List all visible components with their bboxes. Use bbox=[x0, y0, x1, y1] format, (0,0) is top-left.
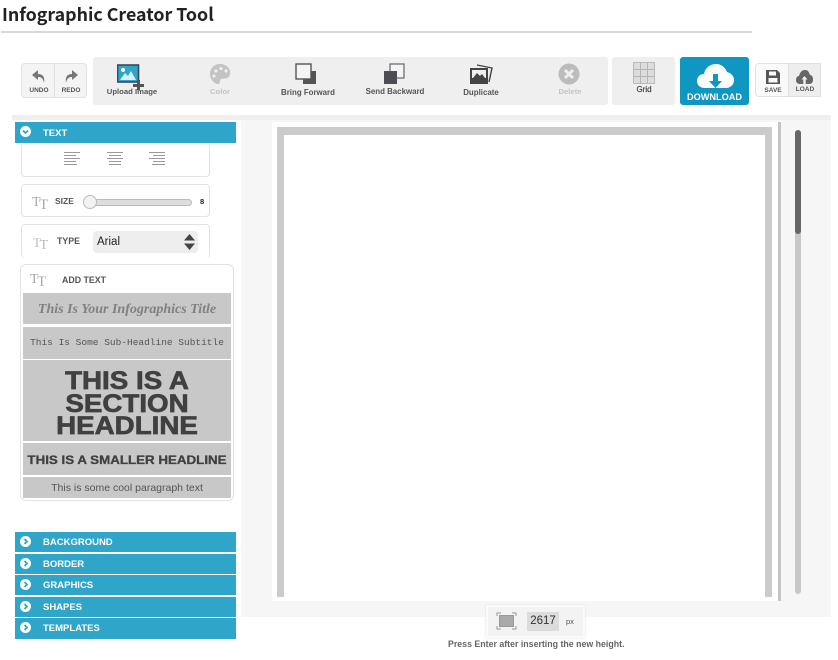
alignment controls bbox=[21, 143, 210, 177]
icon: load bbox=[796, 70, 813, 84]
icon: align right bbox=[149, 152, 165, 165]
sample: section headline: THIS IS A bbox=[65, 367, 189, 395]
sample: paragraph bbox=[23, 477, 231, 498]
icon: duplicate bbox=[470, 64, 493, 84]
download button bbox=[680, 57, 749, 105]
font select: Arial bbox=[97, 236, 120, 248]
icon: text size: TT bbox=[32, 195, 47, 213]
scrollbar thumb bbox=[795, 130, 801, 234]
scrollbar bbox=[795, 130, 801, 594]
label: download: DOWNLOAD bbox=[687, 92, 742, 102]
page sheet bbox=[272, 122, 781, 601]
slider bbox=[84, 199, 192, 206]
toolbar panel bbox=[93, 57, 608, 105]
canvas frame bbox=[277, 127, 772, 597]
shapes section: SHAPES bbox=[43, 602, 82, 613]
panel: canvas workspace bbox=[241, 120, 831, 617]
shapes section bbox=[15, 597, 236, 617]
title: Infographic Creator Tool bbox=[2, 1, 214, 27]
sample: title bbox=[23, 293, 231, 324]
graphics section: GRAPHICS bbox=[43, 580, 93, 591]
sample: subtitle: This Is Some Sub-Headline Subtitle bbox=[30, 337, 224, 348]
text section header: TEXT bbox=[43, 128, 67, 139]
icon: align left bbox=[64, 152, 80, 165]
label: redo: REDO bbox=[62, 87, 80, 94]
background section: BACKGROUND bbox=[43, 537, 113, 548]
label: load: LOAD bbox=[796, 86, 814, 93]
background section bbox=[15, 532, 236, 552]
value: 8 bbox=[200, 197, 204, 206]
templates section bbox=[15, 618, 236, 639]
height hint: Press Enter after inserting the new height. bbox=[448, 639, 624, 649]
sample: smaller headline: THIS IS A SMALLER HEADLINE bbox=[27, 453, 227, 467]
sample: smaller headline bbox=[23, 443, 231, 475]
label: delete: Delete bbox=[558, 87, 582, 96]
font select bbox=[93, 231, 198, 253]
icon: resize bbox=[496, 612, 516, 630]
icon: align center bbox=[107, 152, 123, 165]
sample: section headline bbox=[23, 360, 231, 441]
label: add text: ADD TEXT bbox=[62, 275, 106, 285]
panel: text tools bbox=[15, 122, 236, 501]
border section bbox=[15, 554, 236, 574]
sample: section headline: SECTION bbox=[65, 390, 189, 418]
label: upload image: Upload Image bbox=[107, 87, 157, 96]
icon: cloud download bbox=[697, 64, 734, 88]
graphics section bbox=[15, 575, 236, 595]
icon: undo bbox=[32, 70, 44, 83]
icon: color palette bbox=[210, 64, 230, 84]
height control bbox=[486, 605, 585, 638]
height value: 2617 bbox=[530, 615, 556, 627]
border section: BORDER bbox=[43, 559, 84, 570]
type control bbox=[21, 224, 210, 258]
icon: upload image bbox=[117, 64, 144, 90]
label: undo: UNDO bbox=[29, 87, 49, 94]
label: bring forward: Bring Forward bbox=[281, 88, 335, 97]
label: save: SAVE bbox=[764, 87, 782, 94]
label: size: SIZE bbox=[55, 196, 74, 206]
icon: bring forward bbox=[295, 63, 316, 84]
label: grid: Grid bbox=[636, 85, 652, 94]
icon: delete bbox=[558, 64, 580, 84]
sample: subtitle bbox=[23, 327, 231, 359]
icon: text type: TT bbox=[33, 235, 47, 253]
label: duplicate: Duplicate bbox=[463, 88, 499, 97]
grid button bbox=[612, 57, 675, 105]
icon: add text: TT bbox=[30, 272, 45, 290]
sample: section headline: HEADLINE bbox=[56, 412, 198, 440]
size control bbox=[21, 184, 210, 217]
text section header bbox=[15, 122, 236, 143]
icon: send backward bbox=[384, 63, 405, 84]
sample: paragraph: This is some cool paragraph text bbox=[51, 482, 203, 494]
panel: collapsed sections bbox=[15, 532, 236, 639]
add text panel bbox=[20, 264, 234, 501]
undo redo buttons bbox=[21, 63, 87, 98]
label: type: TYPE bbox=[57, 236, 80, 246]
icon: grid bbox=[633, 62, 655, 84]
templates section: TEMPLATES bbox=[43, 623, 100, 634]
icon: redo bbox=[66, 70, 78, 83]
sample: title: This Is Your Infographics Title bbox=[38, 302, 216, 317]
label: send backward: Send Backward bbox=[366, 87, 424, 96]
icon: save bbox=[766, 70, 780, 84]
label: color: Color bbox=[210, 87, 230, 96]
unit: px bbox=[566, 617, 574, 626]
height value bbox=[527, 612, 559, 631]
save and load buttons bbox=[755, 63, 821, 97]
